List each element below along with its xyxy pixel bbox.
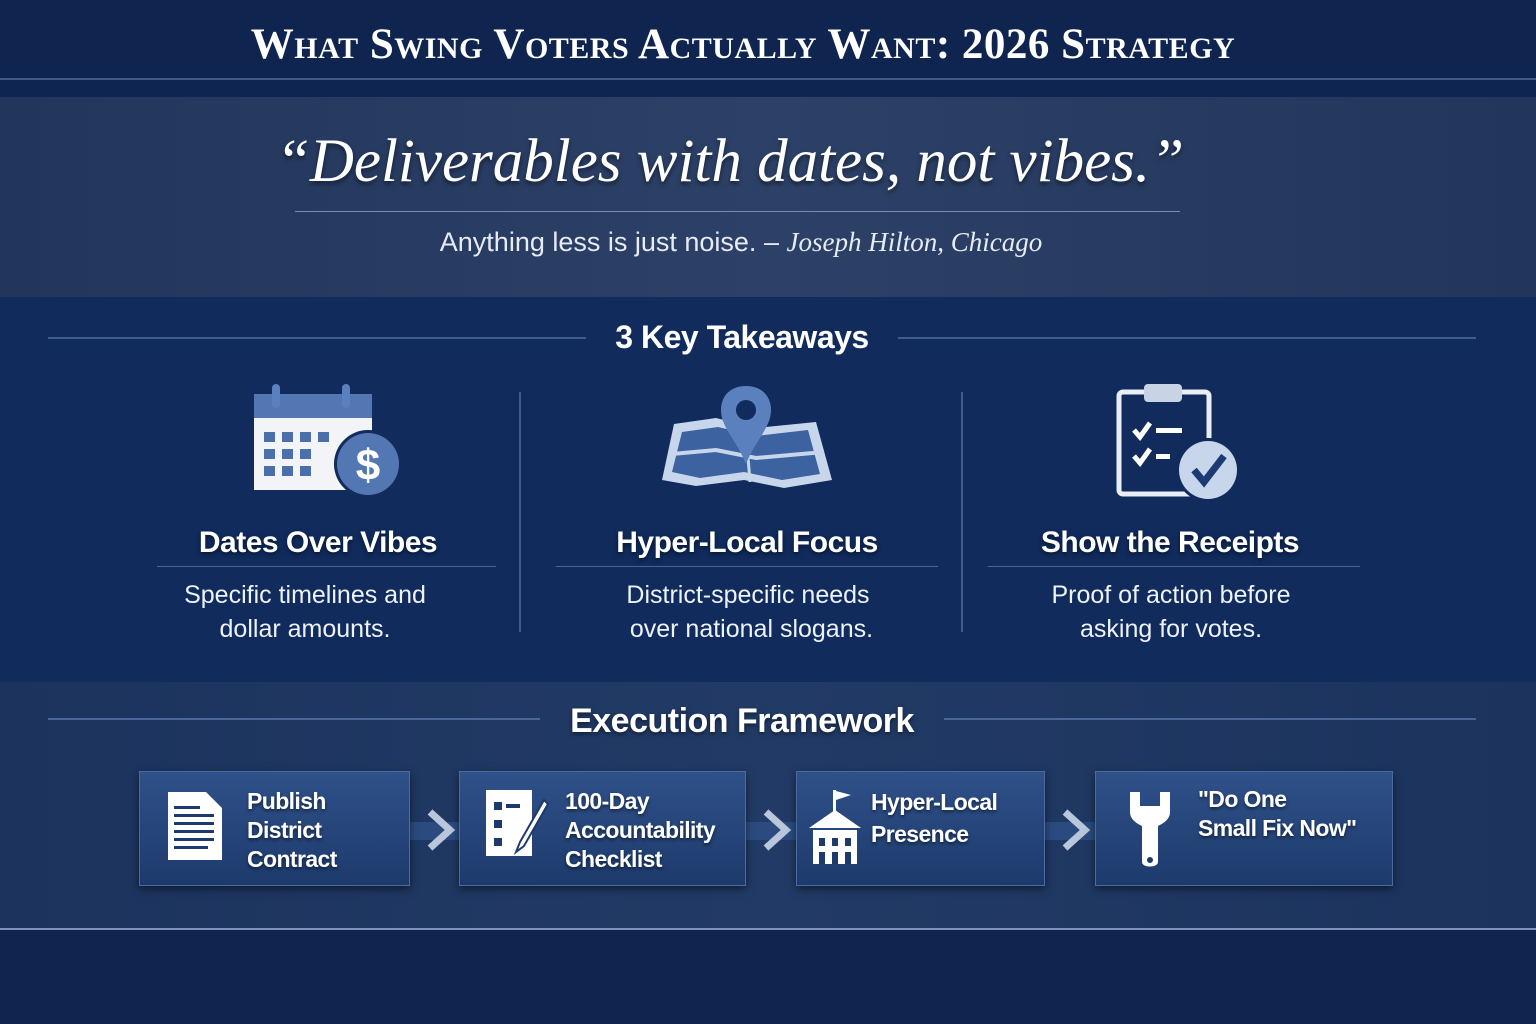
icon: town hall with flag bbox=[809, 790, 861, 864]
description: asking for votes. bbox=[1080, 615, 1262, 643]
title: Hyper-Local Focus bbox=[616, 526, 878, 559]
step 4 bbox=[1095, 771, 1393, 886]
description bbox=[184, 581, 426, 643]
icon: document bbox=[168, 792, 222, 860]
title band bbox=[0, 0, 1536, 80]
description: dollar amounts. bbox=[220, 615, 390, 643]
label bbox=[564, 788, 716, 872]
bottom band bbox=[0, 928, 1536, 1024]
label bbox=[870, 789, 998, 847]
label: Contract bbox=[247, 846, 337, 872]
quote band bbox=[0, 97, 1536, 297]
title: What Swing Voters Actually Want: 2026 Strategy bbox=[251, 21, 1235, 68]
description bbox=[1051, 581, 1291, 643]
step 2 bbox=[459, 771, 746, 886]
title: Dates Over Vibes bbox=[199, 526, 437, 559]
arrow bbox=[1062, 809, 1090, 851]
label bbox=[246, 788, 338, 872]
label: Hyper-Local bbox=[871, 789, 997, 815]
execution panel bbox=[0, 682, 1536, 928]
description bbox=[626, 581, 873, 643]
icon: checklist with pen bbox=[486, 790, 549, 856]
description: Proof of action before bbox=[1051, 581, 1291, 609]
label: District bbox=[247, 817, 321, 843]
description: Specific timelines and bbox=[184, 581, 426, 609]
takeaway: dates over vibes bbox=[157, 384, 496, 643]
quote: “Deliverables with dates, not vibes.” bbox=[276, 128, 1184, 195]
label: 100-Day bbox=[565, 788, 649, 814]
label: Checklist bbox=[565, 846, 662, 872]
label: Publish bbox=[247, 788, 326, 814]
takeaway: show the receipts bbox=[988, 384, 1360, 643]
attribution: Anything less is just noise. – Joseph Hilton, Chicago bbox=[440, 227, 1042, 257]
title: Show the Receipts bbox=[1041, 526, 1299, 559]
step 3 bbox=[796, 771, 1045, 886]
arrow bbox=[764, 809, 792, 851]
label: Presence bbox=[871, 821, 968, 847]
label bbox=[1198, 786, 1357, 841]
arrow bbox=[428, 809, 456, 851]
icon: wrench bbox=[1130, 792, 1170, 866]
step 1 bbox=[139, 771, 410, 886]
description: District-specific needs bbox=[626, 581, 870, 609]
heading: execution framework: Execution Framework bbox=[570, 702, 914, 740]
takeaway: hyper-local focus bbox=[556, 386, 938, 643]
takeaways panel bbox=[0, 297, 1536, 682]
icon: clipboard checklist bbox=[1116, 384, 1237, 499]
label: "Do One bbox=[1198, 786, 1286, 812]
label: Accountability bbox=[565, 817, 715, 843]
icon: calendar with dollar: $ bbox=[356, 441, 380, 490]
description: over national slogans. bbox=[630, 615, 873, 643]
icon: map with pin bbox=[662, 386, 832, 488]
label: Small Fix Now" bbox=[1198, 815, 1356, 841]
heading: 3 key takeaways: 3 Key Takeaways bbox=[615, 319, 869, 355]
icon: calendar with dollar bbox=[254, 384, 399, 495]
